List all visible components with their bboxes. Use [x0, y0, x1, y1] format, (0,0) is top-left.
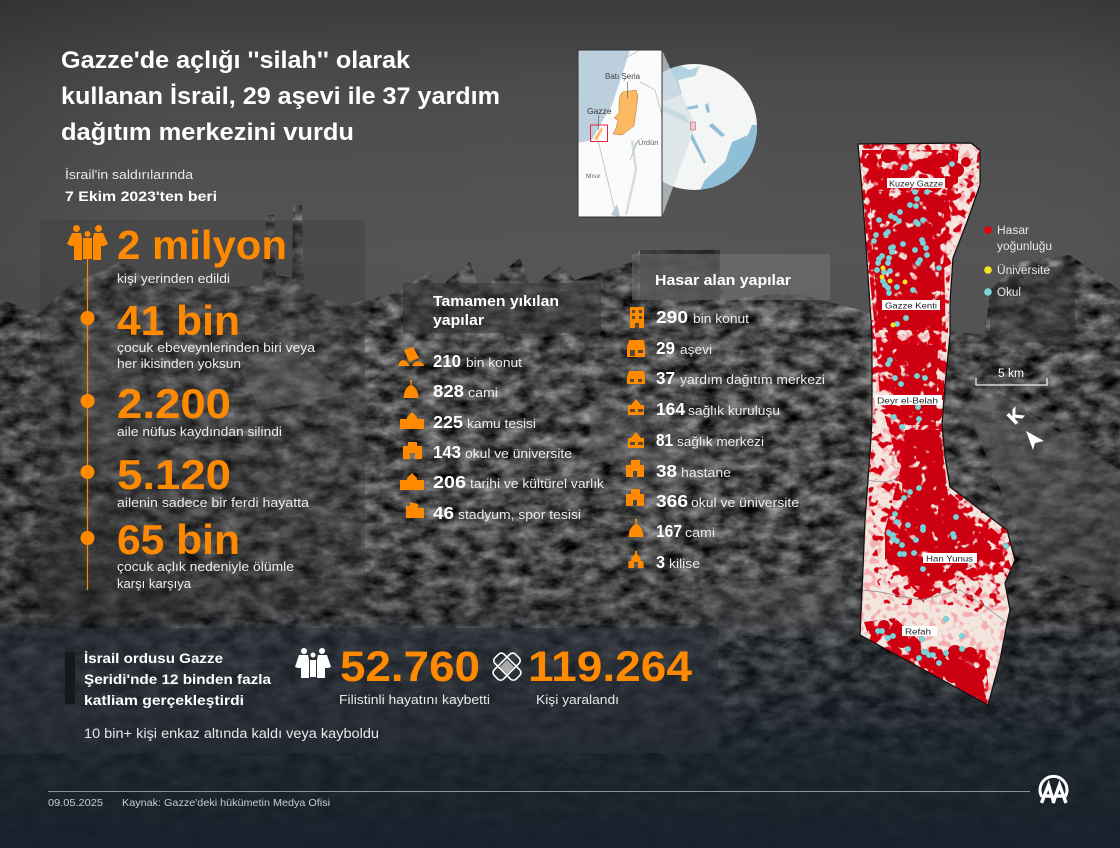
label: Deyr el-Belah: Deyr el-Belah — [877, 396, 938, 406]
stat: 5.120: 5.120 — [117, 451, 231, 498]
stat: 41 bin: her ikisinden yoksun — [117, 356, 241, 371]
row: 290 konut — [630, 307, 749, 328]
stat: 5.120: ailenin sadece bir ferdi hayatta — [117, 495, 310, 510]
subtitle: 7 Ekim 2023'ten beri — [65, 189, 217, 204]
row: 225 kamu tesisi — [400, 412, 536, 432]
scale bar: 5 km — [998, 368, 1024, 380]
row: 366 okul: 366 — [656, 491, 688, 511]
row: 37 yardım: 37 — [656, 368, 675, 388]
row: 29 aşevi — [627, 338, 712, 358]
row: 143 okul: okul ve üniversite — [465, 446, 572, 461]
icon: family orange — [67, 225, 108, 260]
inset location map — [578, 50, 760, 217]
massacre text: katliam gerçekleştirdi — [84, 692, 244, 708]
row: 3 kilise: kilise — [669, 556, 700, 571]
row: 164 sağlık kuruluşu — [628, 399, 780, 419]
row: 206 tarihi — [400, 472, 605, 492]
stat: 65 bin: karşı karşıya — [117, 576, 192, 591]
massacre text: İsrail ordusu Gazze — [84, 650, 223, 666]
title — [61, 47, 500, 146]
row: 828 cami: cami — [468, 385, 498, 400]
stat: 2.200 — [80, 380, 282, 439]
row: 143 okul — [403, 442, 572, 462]
row: 3 kilise — [628, 551, 700, 572]
icon: bandage — [491, 651, 523, 682]
row: 210 konut — [398, 347, 522, 371]
panel: casualties — [0, 628, 718, 753]
map panel: Ürdün — [638, 138, 658, 147]
heading: yapılar — [433, 313, 484, 329]
heading — [433, 294, 559, 329]
map outline — [858, 143, 1015, 705]
accent bar — [65, 652, 75, 704]
row: 38 hastane: hastane — [681, 465, 731, 480]
injured number: 119.264 — [528, 643, 692, 691]
heading backdrop — [632, 254, 830, 300]
map legend: yoğunluğu — [997, 241, 1052, 253]
row: 290 konut: 290 — [656, 307, 688, 327]
stat: 41 bin — [80, 297, 316, 371]
row: 37 yardım — [627, 368, 825, 388]
row: 167 cami: cami — [685, 525, 715, 540]
footer line — [48, 790, 1030, 792]
map panel: Mısır — [586, 173, 601, 180]
map legend: Üniversite — [997, 265, 1050, 277]
label: Kuzey Gazze: Kuzey Gazze — [889, 178, 943, 188]
panel: damaged structures — [626, 254, 830, 572]
footer source: Kaynak: Gazze'deki hükümetin Medya Ofisi — [122, 797, 330, 809]
label: Refah — [902, 626, 937, 636]
map panel: Gazze — [587, 106, 612, 116]
row: 38 hastane — [626, 460, 731, 481]
globe — [662, 64, 757, 190]
row: 29 aşevi: aşevi — [680, 342, 712, 357]
stat: 2.200: aile nüfus kaydından silindi — [117, 424, 282, 439]
stat: 65 bin: 65 bin — [117, 516, 240, 563]
stat: 2.200: 2.200 — [117, 380, 231, 427]
heading: Tamamen yıkılan — [433, 294, 559, 310]
row: 81 sağlık merkezi: sağlık merkezi — [677, 434, 764, 449]
title: dağıtım merkezini vurdu — [61, 119, 354, 146]
label: Han Yunus: Han Yunus — [926, 554, 973, 564]
row: 3 kilise: 3 — [656, 552, 665, 572]
timeline line — [86, 255, 88, 590]
row: 143 okul: 143 — [433, 442, 461, 462]
globe marker — [690, 122, 696, 130]
row: 46 stadyum — [406, 502, 581, 523]
row: 164 sağlık kuruluşu: 164 — [656, 399, 685, 419]
damage map of Gaza Strip — [855, 140, 1020, 710]
map panel — [578, 50, 662, 217]
connector to globe — [662, 50, 694, 217]
panel: destroyed structures — [398, 283, 605, 523]
row: 81 sağlık merkezi — [628, 430, 764, 450]
heading: Hasar alan yapılar — [655, 273, 791, 289]
map base — [858, 143, 1015, 705]
row: 225 kamu tesisi: 225 — [433, 412, 463, 432]
footer date: 09.05.2025 — [48, 797, 103, 809]
row: 29 aşevi: 29 — [656, 338, 675, 358]
row: 37 yardım: yardım dağıtım merkezi — [680, 372, 825, 387]
stat: 5.120 — [80, 451, 310, 510]
label: Gazze Kenti: Gazze Kenti — [885, 300, 937, 310]
stat: 41 bin: çocuk ebeveynlerinden biri veya — [117, 340, 316, 355]
map panel: Batı Şeria — [605, 72, 641, 81]
north arrow — [1004, 404, 1044, 450]
university markers — [880, 266, 908, 328]
massacre text: Şeridi'nde 12 binden fazla — [84, 671, 271, 687]
row: 206 tarihi: 206 — [433, 472, 466, 492]
row: 225 kamu tesisi: kamu tesisi — [467, 416, 536, 431]
row: 164 sağlık kuruluşu: sağlık kuruluşu — [688, 403, 780, 418]
heading backdrop — [403, 283, 601, 333]
row: 366 okul: okul ve üniversite — [691, 495, 799, 510]
school markers — [871, 161, 1009, 666]
row: 210 konut: bin konut — [466, 355, 522, 370]
injured caption: Kişi yaralandı — [536, 692, 619, 707]
stat: 65 bin: çocuk açlık nedeniyle ölümle — [117, 559, 294, 574]
massacre text — [84, 650, 271, 708]
row: 206 tarihi: tarihi ve kültürel varlık — [470, 476, 605, 491]
scale bar — [976, 368, 1047, 385]
north arrow: K — [1004, 404, 1027, 428]
map legend: Hasar — [997, 225, 1029, 237]
row: 167 cami: 167 — [656, 521, 682, 541]
row: 210 konut: 210 — [433, 351, 461, 371]
stat: 65 bin — [80, 516, 294, 591]
West Bank — [613, 90, 638, 135]
stat: 2 milyon: 2 milyon — [117, 222, 287, 268]
label: Refah: Refah — [905, 626, 931, 636]
deaths caption: Filistinli hayatını kaybetti — [339, 692, 490, 707]
row: 46 stadyum: 46 — [433, 503, 454, 523]
row: 366 okul — [626, 489, 799, 511]
stat: 2 milyon: kişi yerinden edildi — [117, 271, 230, 286]
Gaza marker — [590, 125, 608, 142]
deaths number: 52.760 — [340, 643, 480, 691]
stat: 41 bin: 41 bin — [117, 297, 240, 344]
row: 828 cami: 828 — [433, 381, 464, 401]
map legend — [984, 225, 1052, 299]
title: Gazze'de açlığı ''silah'' olarak — [61, 47, 411, 74]
row: 290 konut: bin konut — [693, 311, 749, 326]
row: 46 stadyum: stadyum, spor tesisi — [458, 507, 581, 522]
row: 38 hastane: 38 — [656, 461, 677, 481]
damage density — [855, 140, 1020, 710]
subtitle — [65, 167, 217, 204]
panel: left statistics backdrop — [40, 220, 365, 612]
map legend: Okul — [997, 287, 1021, 299]
icon: agency logo — [1040, 776, 1067, 803]
icon: family white — [295, 648, 331, 678]
title: kullanan İsrail, 29 aşevi ile 37 yardım — [61, 83, 500, 110]
row: 167 cami — [628, 519, 715, 541]
row: 828 cami — [404, 380, 498, 401]
row: 81 sağlık merkezi: 81 — [656, 430, 673, 450]
missing text: 10 bin+ kişi enkaz altında kaldı veya kayboldu — [84, 726, 379, 741]
subtitle: İsrail'in saldırılarında — [65, 167, 194, 182]
